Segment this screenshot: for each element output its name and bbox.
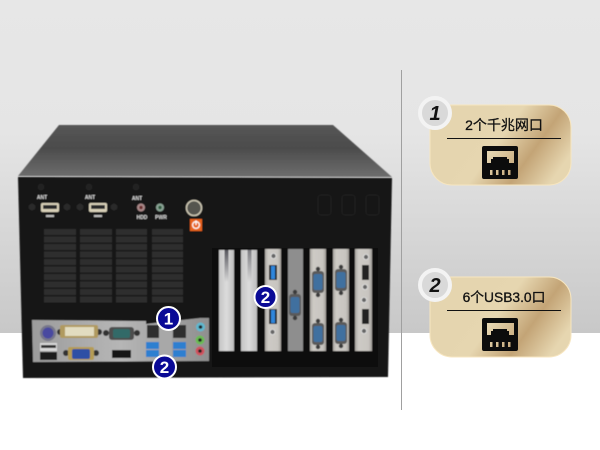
badge 2 on USB ports: 2 bbox=[160, 358, 169, 377]
card 2 rule bbox=[447, 310, 561, 311]
card 1: gigabit ports bbox=[420, 98, 571, 185]
expansion slots bbox=[212, 248, 378, 367]
antenna and USB front controls: ANT bbox=[85, 195, 95, 201]
vertical divider bbox=[401, 70, 402, 410]
chassis top bbox=[18, 125, 392, 177]
computer chassis bbox=[18, 125, 392, 378]
card 2 icon: ethernet port bbox=[482, 318, 518, 351]
antenna and USB front controls: HDD bbox=[137, 215, 148, 221]
chassis front bbox=[18, 177, 392, 378]
badge 2 on USB ports bbox=[153, 356, 176, 378]
badge 1 on LAN ports: 1 bbox=[164, 310, 173, 328]
card 1 icon: ethernet port bbox=[482, 146, 518, 179]
card 1 rule bbox=[447, 138, 561, 139]
rear I/O panel bbox=[32, 318, 209, 362]
card 2 label: 6个USB3.0口 bbox=[463, 290, 545, 305]
card 2 number bbox=[420, 270, 450, 300]
antenna and USB front controls: PWR bbox=[155, 215, 167, 221]
antenna and USB front controls: ANT bbox=[132, 196, 142, 202]
badge 1 on LAN ports bbox=[157, 307, 180, 330]
antenna and USB front controls bbox=[28, 184, 167, 221]
badge 2 on USB card: 2 bbox=[261, 288, 270, 307]
antenna and USB front controls: ANT bbox=[37, 195, 47, 201]
side connector outlines bbox=[318, 195, 379, 215]
card 1 number bbox=[420, 98, 450, 128]
card 1 number: 1 bbox=[429, 103, 441, 125]
power button bbox=[186, 200, 202, 231]
badge 2 on USB card bbox=[254, 286, 276, 308]
card 1 label: 2个千兆网口 bbox=[465, 117, 543, 133]
card 2: USB 3.0 ports bbox=[420, 270, 571, 357]
card 2 number: 2 bbox=[428, 275, 441, 297]
ventilation grid bbox=[44, 229, 183, 302]
